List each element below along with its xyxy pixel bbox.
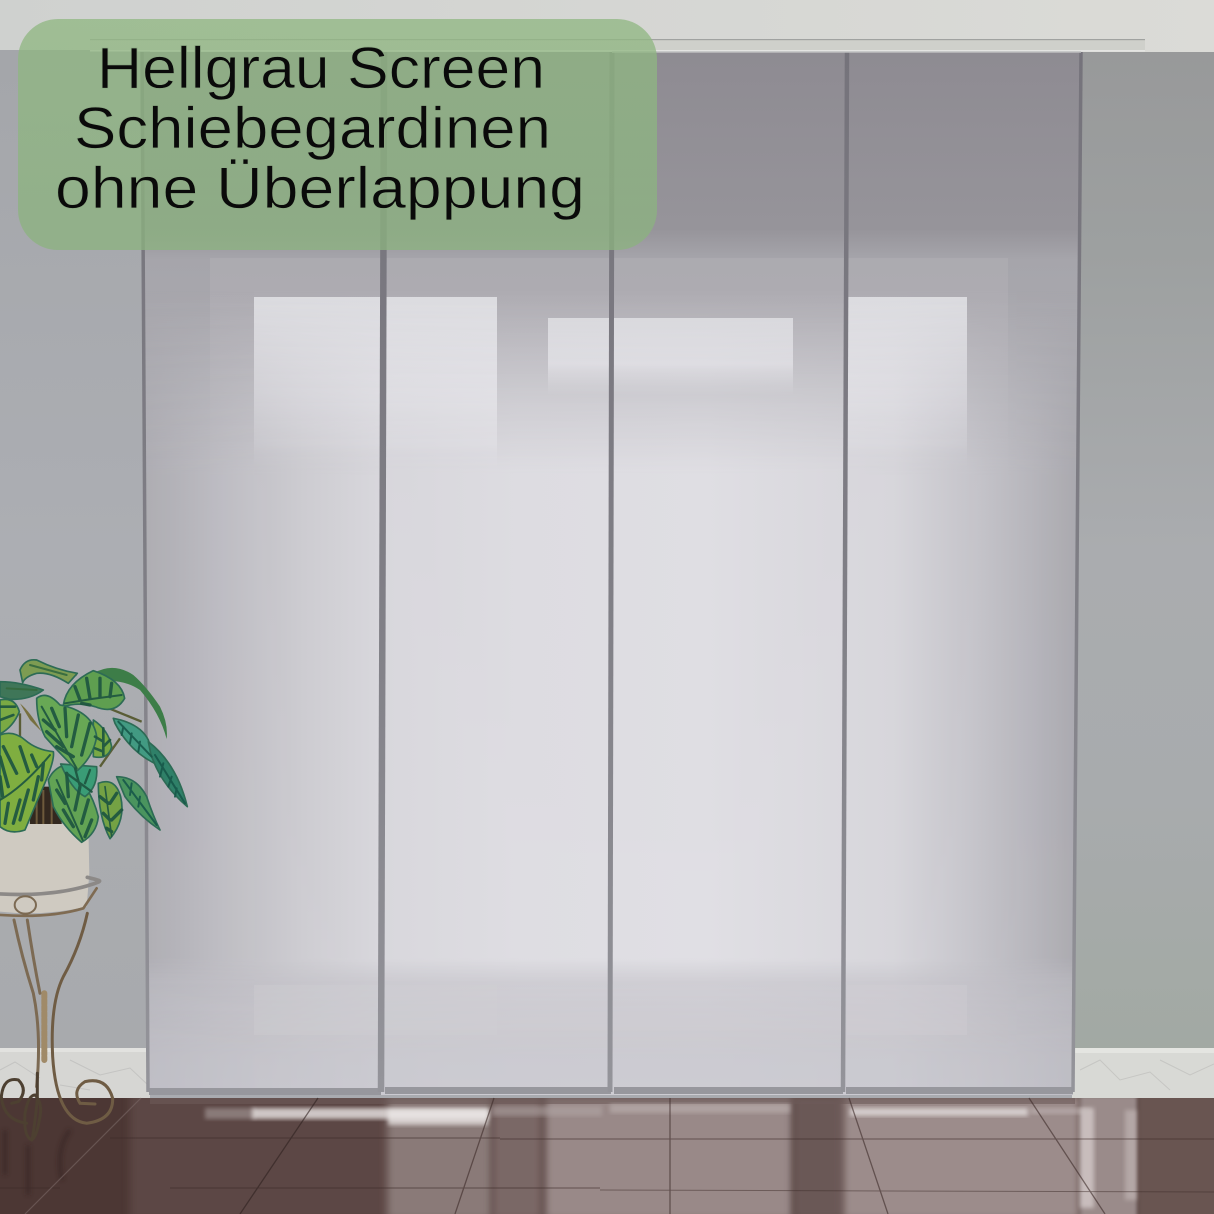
plant on metal stand [0, 660, 187, 1140]
panel fabric base [141, 52, 1081, 1095]
wall: right [1072, 52, 1214, 1050]
title badge [18, 19, 657, 250]
baseboard: left [0, 1048, 150, 1098]
drooping leaves [113, 718, 156, 764]
tile grout lines [0, 1098, 1214, 1214]
flower pot [0, 824, 89, 913]
curtain rail [90, 39, 1145, 52]
stems [20, 672, 142, 825]
leaves [0, 660, 187, 842]
panel edges [142, 52, 1081, 1092]
leaf back right [93, 720, 112, 757]
window frame haze [210, 258, 1008, 1048]
dark top strip of floor [150, 1098, 1075, 1104]
lower right leaves [117, 777, 160, 830]
lower pane outlines [254, 985, 497, 1035]
window pane right [848, 297, 967, 442]
title text: Hellgrau Screen [97, 36, 545, 101]
wall: left [0, 50, 150, 1050]
leaf left upper [0, 699, 19, 734]
floor [0, 1090, 1214, 1214]
badge background [18, 19, 657, 250]
leaf top [20, 660, 77, 683]
leaf stripes [0, 665, 122, 840]
leaf top right [63, 671, 125, 709]
panel hems [149, 1087, 1073, 1095]
large centre leaf [37, 695, 97, 771]
window pane middle [548, 318, 793, 383]
large left leaf [0, 733, 54, 832]
title text [55, 36, 585, 221]
ceiling [0, 0, 1214, 52]
baseboard: right [1072, 1048, 1214, 1098]
leaf lower middle [48, 765, 98, 842]
sliding panels [141, 52, 1086, 1100]
soft light through the fabric [148, 318, 1074, 1048]
window pane left [254, 297, 497, 442]
title text: Schiebegardinen [74, 96, 551, 161]
stand reflection [5, 1130, 70, 1195]
leaf long drooping [93, 668, 167, 739]
title text: ohne Überlappung [55, 156, 585, 221]
stand [0, 877, 113, 1140]
